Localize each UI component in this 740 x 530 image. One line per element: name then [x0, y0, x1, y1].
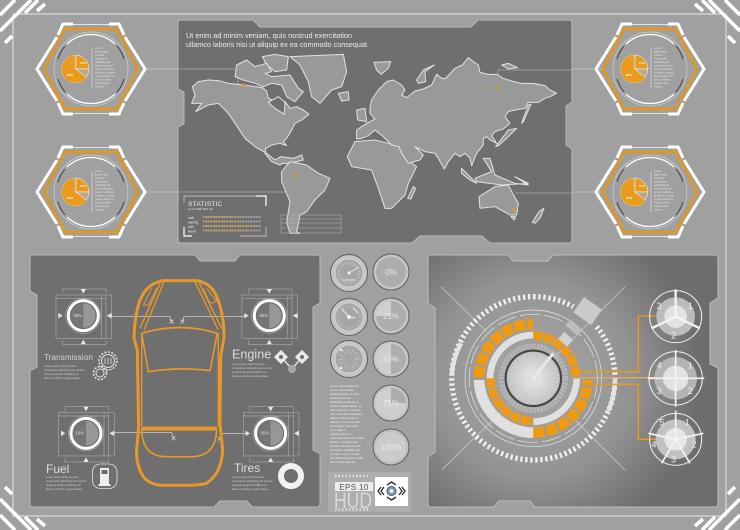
label: tires: Tires — [234, 461, 260, 475]
label: engine: labore et dolore magna aliqua. — [232, 374, 269, 378]
dial: 75 percent: 75% — [383, 399, 399, 408]
hexagon top right: consectetur — [654, 58, 667, 60]
connector lines — [111, 317, 248, 441]
gauge: engine: 65% — [259, 313, 268, 318]
segment chart: four parts: 3 — [657, 386, 662, 396]
connector lines from hexagons to map — [146, 69, 604, 192]
segment chart: three parts: 1 — [688, 301, 693, 311]
hexagon bottom right: ipsum dolor — [654, 174, 667, 176]
segment chart: five parts — [648, 411, 703, 465]
hexagon bottom right: tempor incididunt — [654, 191, 673, 194]
lorem text block: anim id est laborum. — [330, 460, 357, 464]
small table — [281, 215, 341, 233]
hexagon top right: 62% — [626, 73, 632, 77]
hexagon bottom left: enim ad minim — [95, 202, 111, 204]
gauge: tires — [243, 407, 299, 462]
label: fuel: labore et dolore magna aliqua. — [46, 487, 83, 491]
radar tick ring — [452, 297, 615, 460]
hexagon bottom right: Lorem — [654, 170, 661, 173]
lorem text block: incididunt ut labore et — [330, 400, 359, 404]
segment chart: five parts: 5 — [659, 417, 664, 427]
hexagon top left: ipsum dolor — [95, 50, 108, 54]
dial: 75 percent — [373, 385, 409, 421]
lorem text block: proident, sunt in culpa — [330, 452, 360, 456]
dial: 25 percent: 25% — [383, 312, 399, 321]
hexagon top right: adipiscing elit — [654, 61, 669, 64]
hexagon bottom right: sit amet, — [654, 177, 664, 180]
hexagon bottom left: adipiscing elit — [95, 184, 110, 187]
hexagon top left: Lorem — [95, 47, 102, 50]
statistic box: loading — [188, 220, 199, 224]
icon: pistons — [274, 350, 309, 373]
hexagon bottom left: 24% — [80, 184, 86, 188]
hexagon bottom left: tempor incididunt — [95, 191, 114, 194]
hexagon bottom left: Lorem — [95, 170, 102, 173]
statistic box — [184, 196, 266, 236]
label: transmission: Lorem ipsum dolor sit amet, — [44, 364, 77, 368]
label: transmission — [44, 353, 93, 380]
icon: tire — [281, 466, 301, 486]
map location markers — [241, 83, 517, 213]
panel: central dials — [328, 254, 411, 513]
label: fuel — [46, 462, 87, 491]
hexagon top left: 24% — [80, 61, 86, 65]
hexagon bottom right: nostrud — [654, 208, 663, 212]
lorem text block: adipiscing elit, sed do — [330, 392, 359, 396]
label: engine: Lorem ipsum dolor sit amet, — [232, 362, 265, 366]
label: tires: Lorem ipsum dolor sit amet, — [232, 475, 265, 479]
hexagon top right: enim ad minim — [654, 78, 670, 82]
lorem text block: amet, consectetur — [330, 388, 354, 392]
gauge: transmission — [56, 289, 112, 344]
hexagon top left: ut labore et dolore — [95, 72, 116, 74]
hexagon bottom left — [37, 147, 145, 237]
label: engine — [232, 348, 273, 378]
label: tires: labore et dolore magna aliqua. — [232, 487, 269, 491]
hexagon bottom right: 24% — [639, 184, 645, 188]
hexagon top right: ut labore et dolore — [654, 72, 675, 74]
segment chart: three parts: 2 — [671, 330, 676, 340]
hexagon top right — [596, 24, 704, 114]
segment chart: five parts: 4 — [651, 439, 656, 449]
hexagon bottom left: ut labore et dolore — [95, 194, 116, 198]
radar light arcs — [490, 335, 577, 422]
hexagon top left: veniam, quis — [95, 82, 110, 85]
segment chart: four parts: 2 — [688, 386, 693, 396]
hexagon bottom left: sit amet, — [95, 177, 105, 180]
lorem text block: quis nostrud exercitation — [330, 412, 363, 416]
car outline — [134, 281, 224, 485]
panel: car diagnostics — [30, 255, 320, 507]
segment chart: five parts: 3 — [671, 454, 676, 464]
label: fuel: eiusmod tempor incididunt ut — [46, 483, 81, 487]
HUD badge: EPS 10 — [339, 483, 369, 492]
hexagon top right: Lorem — [654, 47, 661, 50]
radar thin rings — [465, 310, 602, 447]
label: engine: eiusmod tempor incididunt ut — [232, 370, 267, 374]
hexagon top right: 24% — [639, 61, 645, 65]
hexagon top right: veniam, quis — [654, 82, 669, 85]
panel: world map — [178, 20, 572, 243]
segment chart: three parts: 3 — [656, 301, 661, 311]
hexagon bottom right — [596, 147, 704, 237]
segment chart: five parts: 2 — [691, 439, 696, 449]
panel: world map: ullamco laboris nisi ut aliquip ex ea commodo consequat. — [186, 40, 369, 49]
radar pointer blocks — [558, 297, 602, 347]
lorem text block: reprehenderit in — [330, 432, 351, 436]
hexagon top left: sed do eiusmod — [95, 64, 113, 68]
radar connectors — [580, 316, 673, 439]
label: fuel: consectetur adipiscing elit, sed do — [46, 479, 87, 483]
hexagon top left: consectetur — [95, 58, 108, 60]
radar rays — [441, 287, 625, 470]
hexagon top left: sit amet, — [95, 54, 105, 57]
statistic box: level 2388-4481-18 — [188, 207, 213, 211]
label: engine: Engine — [232, 348, 271, 362]
dial: speedometer — [330, 254, 368, 292]
hexagon bottom left: 62% — [67, 196, 73, 200]
HUD badge: HUD — [334, 488, 372, 513]
dial: 100 percent: 100% — [381, 443, 401, 452]
statistic box: views — [188, 230, 196, 234]
hexagon top left: tempor incididunt — [95, 68, 114, 71]
lorem text block: pariatur. Excepteur sint — [330, 444, 361, 448]
world map continents — [192, 54, 557, 233]
radar inner tick ring — [501, 346, 565, 410]
lorem text block: Lorem ipsum dolor sit — [330, 384, 359, 388]
hexagon top left: 62% — [67, 73, 73, 77]
segment chart: three parts — [650, 289, 702, 343]
hexagon bottom left: nostrud — [95, 208, 104, 212]
hexagon bottom right: veniam, quis — [654, 205, 669, 208]
gauge: transmission: 98% — [73, 313, 82, 318]
label: transmission: consectetur adipiscing elit, sed do — [44, 368, 85, 372]
segment chart: four parts: 4 — [657, 360, 662, 370]
hexagon bottom right: adipiscing elit — [654, 184, 669, 187]
map heading text: Ut enim ad minim veniam, quis nostrud exercitation — [186, 31, 352, 40]
icon: fuel pump — [92, 464, 117, 488]
hexagon bottom right: 62% — [626, 196, 632, 200]
lorem text block: enim ad minim veniam, — [330, 408, 361, 412]
hexagon top right: ipsum dolor — [654, 50, 667, 54]
label: transmission: eiusmod tempor incididunt ut — [44, 372, 79, 376]
radar orange blocks — [479, 324, 588, 433]
segment chart: four parts: 1 — [688, 360, 693, 370]
hexagon top right: magna aliqua. Ut — [654, 75, 673, 78]
label: fuel: Lorem ipsum dolor sit amet, — [46, 475, 79, 479]
hexagon bottom left: sed do eiusmod — [95, 188, 113, 190]
dial: 0 percent: 0% — [385, 268, 397, 277]
label: tires: consectetur adipiscing elit, sed do — [232, 479, 273, 483]
lorem text block: dolore eu fugiat nulla — [330, 440, 358, 444]
gauge: engine — [242, 289, 298, 344]
hexagon top right: nostrud — [654, 86, 663, 88]
lorem text block: aliquip ex ea commodo — [330, 420, 361, 424]
label: fuel: Fuel — [46, 462, 69, 476]
hexagon bottom right: enim ad minim — [654, 202, 670, 204]
label: transmission: Transmission — [44, 353, 93, 362]
lorem text block: consequat. Duis aute — [330, 424, 359, 428]
lorem text block: eiusmod tempor — [330, 396, 352, 400]
statistic box: STATISTIC — [188, 201, 223, 208]
segment chart: four parts — [648, 350, 704, 407]
dial: 50 percent: 50% — [383, 355, 399, 364]
dial: 25 percent — [373, 298, 409, 334]
hexagon top left: nostrud — [95, 86, 104, 88]
dial: compass — [330, 298, 368, 336]
hexagon top right: sed do eiusmod — [654, 64, 672, 68]
label: tires: eiusmod tempor incididunt ut — [232, 483, 267, 487]
hexagon bottom right: magna aliqua. Ut — [654, 198, 673, 201]
hexagon bottom right: ut labore et dolore — [654, 194, 675, 198]
lorem text block: irure dolor in — [330, 428, 347, 432]
gauge: fuel — [59, 407, 114, 462]
segment chart: five parts: 1 — [685, 417, 690, 427]
lorem text block: dolore magna aliqua. Ut — [330, 404, 362, 408]
dial: clock — [330, 340, 368, 378]
hexagon bottom left: consectetur — [95, 180, 108, 184]
hexagon top right: tempor incididunt — [654, 68, 673, 71]
statistic box: with — [188, 225, 194, 229]
hexagon top left: magna aliqua. Ut — [95, 75, 114, 78]
hexagon bottom right: consectetur — [654, 180, 667, 184]
dial: 0 percent — [373, 254, 409, 290]
hexagon top left: adipiscing elit — [95, 61, 110, 64]
gauge: fuel: 10% — [75, 431, 84, 436]
gauges and car, drawn at 3x — [56, 281, 299, 485]
icon: gears — [94, 352, 117, 380]
icon: HUD target — [378, 482, 405, 500]
hexagon top left: enim ad minim — [95, 78, 111, 82]
hexagon top left — [37, 24, 145, 114]
hexagon bottom right: sed do eiusmod — [654, 188, 672, 190]
dial: 50 percent — [373, 341, 409, 377]
panel: radar — [428, 255, 718, 507]
hexagon bottom left: ipsum dolor — [95, 174, 108, 176]
hexagon bottom left: magna aliqua. Ut — [95, 198, 114, 201]
radar core — [506, 351, 561, 406]
label: transmission: labore et dolore magna aliqua. — [44, 376, 81, 380]
label: engine: consectetur adipiscing elit, sed do — [232, 366, 273, 370]
hexagon bottom left: veniam, quis — [95, 205, 110, 208]
dial: 100 percent — [373, 429, 409, 465]
label: tires — [232, 461, 273, 491]
statistic box: mail — [188, 216, 194, 220]
gauge: tires: 85% — [261, 431, 269, 436]
hexagon top right: sit amet, — [654, 54, 664, 57]
lorem text block: voluptate velit esse cillum — [330, 436, 365, 440]
lorem text block: qui officia deserunt mollit — [330, 456, 363, 460]
HUD badge — [328, 472, 411, 513]
lorem text block: occaecat cupidatat non — [330, 448, 361, 452]
lorem text block: ullamco laboris nisi ut — [330, 416, 359, 420]
